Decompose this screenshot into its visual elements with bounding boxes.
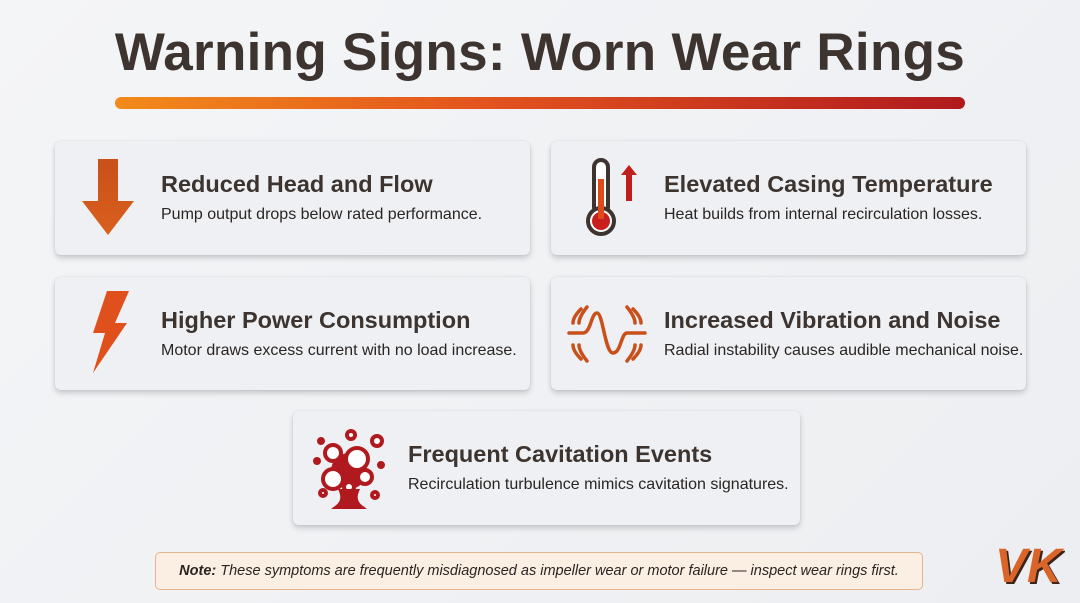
card: elevated casing temperature: Heat builds from internal recirculation losses. <box>664 206 982 223</box>
note box <box>155 552 923 590</box>
card: reduced head and flow: Reduced Head and Flow <box>161 171 433 197</box>
card: higher power consumption <box>55 277 530 390</box>
icon: down arrow <box>82 159 134 235</box>
icon: bubbles <box>313 429 385 509</box>
note box: Note: These symptoms are frequently misdiagnosed as impeller wear or motor failure — inspect wear rings first. <box>179 563 899 579</box>
card: frequent cavitation events: Frequent Cavitation Events <box>408 441 712 467</box>
gradient underline <box>115 97 965 109</box>
icon: lightning bolt <box>93 291 129 373</box>
card: higher power consumption: Motor draws excess current with no load increase. <box>161 342 517 359</box>
card: reduced head and flow: Pump output drops below rated performance. <box>161 206 482 223</box>
card: increased vibration and noise: Increased Vibration and Noise <box>664 307 1001 333</box>
title: Warning Signs: Worn Wear Rings <box>115 23 965 82</box>
card: frequent cavitation events: Recirculation turbulence mimics cavitation signatures. <box>408 476 789 493</box>
card: reduced head and flow <box>55 141 530 255</box>
icon: vibration wave <box>567 305 647 363</box>
card: higher power consumption: Higher Power Consumption <box>161 307 470 333</box>
card: elevated casing temperature <box>551 141 1026 255</box>
icon: thermometer <box>586 158 637 236</box>
card: increased vibration and noise <box>551 277 1026 390</box>
card: elevated casing temperature: Elevated Casing Temperature <box>664 171 993 197</box>
card: increased vibration and noise: Radial instability causes audible mechanical noise. <box>664 342 1023 359</box>
card: frequent cavitation events <box>293 411 800 525</box>
